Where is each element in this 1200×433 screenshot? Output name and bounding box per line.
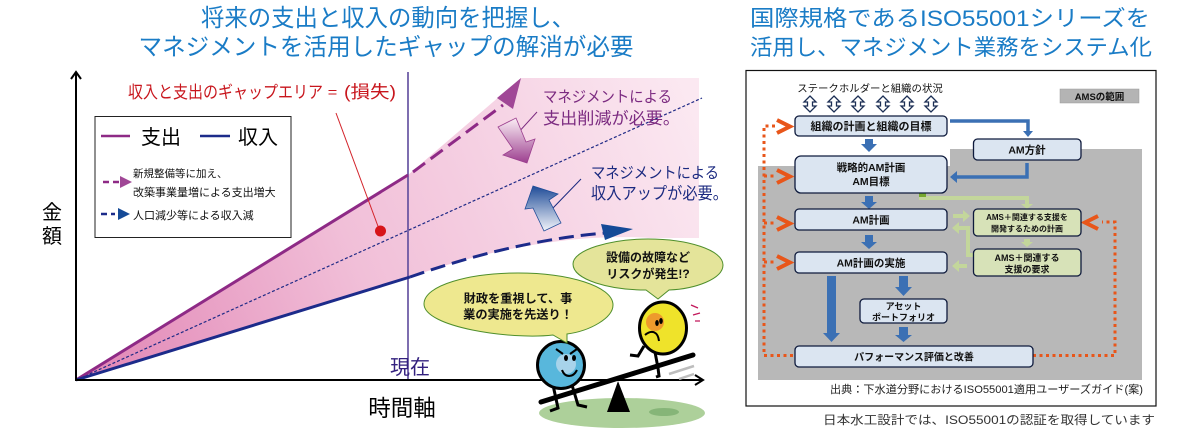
panel frame: [746, 70, 1156, 406]
box: asset portfolio: [860, 299, 947, 323]
box: AMS support plan: 開発するための計画: [991, 224, 1063, 234]
ground: [539, 398, 705, 428]
AMS scope label: AMSの範囲: [1075, 91, 1124, 103]
box: AMS support requirements: AMS＋関連する: [994, 252, 1060, 263]
box: performance evaluation: パフォーマンス評価と改善: [854, 350, 974, 364]
callout: gap area: (損失): [344, 82, 396, 102]
source note: 出典：下水道分野におけるISO55001適用ユーザーズガイド(案): [830, 382, 1143, 396]
callout: raise income: [525, 164, 728, 231]
speech bubble right: 設備の故障など: [606, 250, 690, 264]
box: organisation plan: [795, 116, 947, 136]
box: organisation plan: 組織の計画と組織の目標: [810, 119, 932, 133]
yellow character: [630, 302, 700, 377]
legend: 支出: [141, 126, 181, 149]
axis label: amount: 金: [42, 201, 62, 224]
box: asset portfolio: アセット: [886, 302, 921, 312]
title: right heading: 活用し、マネジメント業務をシステム化: [750, 35, 1152, 60]
stakeholder label: ステークホルダーと組織の状況: [797, 82, 943, 95]
legend: 新規整備等に加え、: [133, 167, 228, 180]
green connectors: [919, 198, 1027, 266]
speech bubble right: [573, 239, 723, 299]
box: AM plan execution: [795, 252, 947, 273]
box: AM plan execution: AM計画の実施: [837, 256, 906, 270]
box: strategic AM plan: [795, 156, 947, 193]
speech bubble left: [424, 273, 613, 343]
seesaw beam: [541, 355, 693, 402]
chart: vertical axis: [71, 72, 81, 381]
box: AM plan: AM計画: [852, 214, 890, 226]
speech bubble left: 財政を重視して、事: [464, 290, 572, 306]
title: left heading: [138, 5, 634, 61]
chart: dotted midline: [76, 98, 702, 380]
chart: gap area between spending and income: [76, 78, 699, 380]
box: AMS support requirements: 支援の要求: [1004, 264, 1050, 274]
box: strategic AM plan: 戦略的AM計画: [837, 161, 905, 174]
box: AM plan: [795, 209, 947, 230]
box: AMS support plan: AMS＋関連する支援を: [986, 212, 1068, 222]
callout: raise income: マネジメントによる: [591, 164, 719, 182]
axis label: amount: 額: [42, 225, 62, 248]
legend: 収入: [238, 126, 278, 149]
legend: 改築事業量増による支出増大: [133, 185, 276, 199]
chart: spending line: [76, 78, 521, 380]
blue flow arrows: [823, 139, 912, 342]
speech bubble left: 業の実施を先送り！: [463, 306, 573, 322]
axis label: amount: [42, 201, 62, 248]
legend: 人口減少等による収入減: [133, 208, 254, 222]
panel: ISO55001 flow diagram: [746, 70, 1156, 406]
illustration: seesaw scene: [424, 239, 723, 428]
callout: reduce spending: 支出削減が必要。: [543, 109, 680, 128]
chart: horizontal axis: [76, 375, 703, 385]
chart: income line: [76, 224, 633, 380]
box: performance evaluation: [795, 346, 1033, 367]
box: AM policy: [974, 139, 1081, 160]
callout: raise income: 収入アップが必要。: [591, 184, 728, 203]
title: left heading: マネジメントを活用したギャップの解消が必要: [138, 34, 634, 61]
title: left heading: 将来の支出と収入の動向を把握し、: [201, 5, 575, 32]
speech bubble right: リスクが発生!?: [606, 266, 690, 281]
callout: reduce spending: マネジメントによる: [543, 88, 672, 106]
box: AM policy: AM方針: [1008, 144, 1046, 156]
callout: gap area: ＝: [327, 85, 338, 102]
motion marks: [669, 366, 694, 379]
blue character: [538, 342, 587, 411]
axis label: time axis: 時間軸: [368, 396, 436, 421]
title: right heading: [750, 6, 1152, 60]
seesaw pivot: [607, 381, 630, 412]
AMS scope label: [1060, 89, 1139, 103]
chart: current time vertical line: [407, 72, 409, 380]
box: asset portfolio: ポートフォリオ: [872, 312, 935, 322]
title: right heading: 国際規格であるISO55001シリーズを: [750, 6, 1150, 31]
box: AMS support requirements: [974, 249, 1081, 276]
callout: gap area: 収入と支出のギャップエリア: [128, 83, 323, 102]
legend: [95, 116, 291, 238]
orange chevrons: [777, 120, 1098, 269]
box: AMS support plan: [974, 209, 1081, 236]
orange feedback loop: [764, 126, 1115, 356]
callout: reduce spending: [498, 88, 680, 163]
box: strategic AM plan: AM目標: [852, 175, 890, 188]
stakeholder double arrows: [804, 96, 937, 112]
label: present: 現在: [390, 356, 430, 379]
callout: gap area: [128, 82, 396, 236]
note: certification: 日本水工設計では、ISO55001の認証を取得しています: [823, 412, 1155, 427]
AMS scope shaded area: [758, 149, 1142, 380]
